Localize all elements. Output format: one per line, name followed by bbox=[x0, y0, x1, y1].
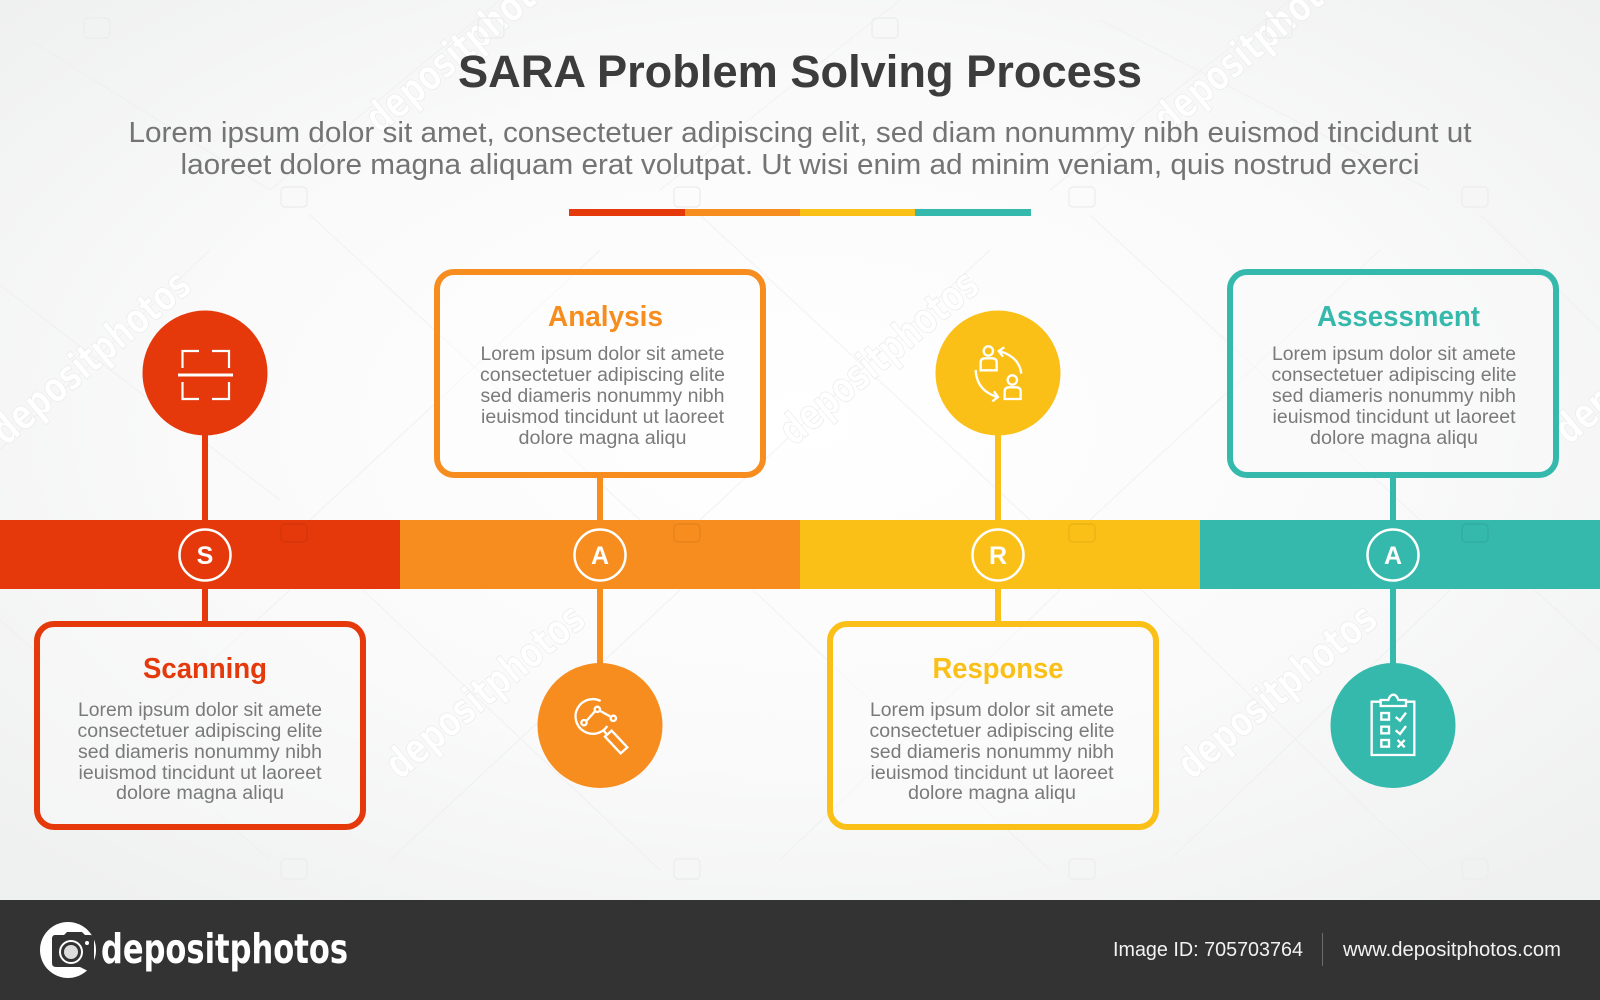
subtitle: laoreet dolore magna aliquam erat volutpat. Ut wisi enim ad minim veniam, quis nostrud exerci bbox=[180, 149, 1420, 181]
heading: Assessment: Assessment bbox=[1317, 301, 1480, 333]
text block: Scanning description: consectetuer adipiscing elite bbox=[78, 721, 322, 742]
text block: Scanning description: ieuismod tincidunt ut laoreet bbox=[78, 763, 322, 784]
panel: Assessment bbox=[1230, 272, 1556, 475]
heading: Scanning: Scanning bbox=[143, 653, 267, 685]
title: SARA Problem Solving Process bbox=[458, 46, 1142, 97]
panel: Response bbox=[830, 624, 1156, 827]
text block: Analysis description: dolore magna aliqu bbox=[518, 428, 686, 449]
watermark text: depositphotos bbox=[0, 0, 1600, 788]
text block: Scanning description bbox=[78, 700, 322, 804]
connector lines bbox=[202, 430, 1396, 672]
text block: Response description: ieuismod tincidunt ut laoreet bbox=[870, 763, 1114, 784]
text block: Analysis description: consectetuer adipiscing elite bbox=[480, 365, 725, 386]
step marker A (analysis) bbox=[574, 530, 626, 580]
text block: Scanning description: dolore magna aliqu bbox=[116, 783, 284, 804]
icon: camera logo bbox=[40, 922, 96, 978]
footer bar bbox=[0, 900, 1600, 1000]
heading: Response: Response bbox=[932, 653, 1064, 685]
text block: Scanning description: Lorem ipsum dolor sit amete bbox=[78, 700, 322, 721]
logo wordmark: depositphotos bbox=[101, 925, 348, 973]
icon: clipboard checklist bbox=[1330, 663, 1456, 788]
website url: www.depositphotos.com bbox=[1342, 939, 1561, 961]
step marker A (analysis): A bbox=[591, 542, 609, 570]
step marker S bbox=[180, 530, 230, 580]
text block: Response description bbox=[870, 700, 1114, 804]
text block: Response description: Lorem ipsum dolor sit amete bbox=[870, 700, 1114, 721]
step marker R bbox=[972, 530, 1024, 580]
panel: Scanning bbox=[37, 624, 363, 827]
title underline: four colour segments bbox=[569, 209, 1031, 216]
text block: Response description: consectetuer adipiscing elite bbox=[870, 721, 1114, 742]
subtitle: Lorem ipsum dolor sit amet, consectetuer adipiscing elit, sed diam nonummy nibh euismod tincidunt ut bbox=[128, 117, 1472, 149]
icon: magnifier with chart bbox=[538, 663, 662, 788]
watermark text: depositphotos: depositphotos bbox=[1167, 593, 1386, 788]
heading: Analysis: Analysis bbox=[548, 301, 663, 333]
text block: Assessment description: sed diameris nonummy nibh bbox=[1272, 386, 1516, 407]
text block: Analysis description: ieuismod tincidunt ut laoreet bbox=[481, 407, 725, 428]
text block: Analysis description: Lorem ipsum dolor sit amete bbox=[480, 344, 724, 365]
step marker R: R bbox=[989, 542, 1007, 570]
step marker S: S bbox=[197, 542, 213, 570]
timeline band bbox=[0, 520, 1600, 589]
text block: Scanning description: sed diameris nonummy nibh bbox=[78, 742, 322, 763]
text block: Assessment description bbox=[1272, 344, 1516, 449]
step marker A (assessment) bbox=[1368, 530, 1418, 580]
icon: scan frame bbox=[142, 310, 268, 436]
text block: Assessment description: dolore magna aliqu bbox=[1310, 428, 1478, 449]
text block: Response description: dolore magna aliqu bbox=[908, 783, 1076, 804]
text block: Response description: sed diameris nonummy nibh bbox=[870, 742, 1114, 763]
text block: Assessment description: Lorem ipsum dolor sit amete bbox=[1272, 344, 1516, 365]
text block: Analysis description bbox=[480, 344, 725, 449]
panel: Analysis bbox=[437, 272, 763, 475]
image id: Image ID: 705703764 bbox=[1113, 939, 1303, 961]
step marker A (assessment): A bbox=[1384, 542, 1402, 570]
watermark text: depositphotos: depositphotos bbox=[375, 593, 594, 788]
text block: Assessment description: consectetuer adipiscing elite bbox=[1272, 365, 1516, 386]
watermark text: depositphotos: depositphotos bbox=[769, 259, 988, 454]
subtitle bbox=[128, 117, 1472, 181]
text block: Assessment description: ieuismod tincidunt ut laoreet bbox=[1272, 407, 1516, 428]
text block: Analysis description: sed diameris nonummy nibh bbox=[480, 386, 724, 407]
icon: people exchange cycle bbox=[936, 310, 1060, 436]
